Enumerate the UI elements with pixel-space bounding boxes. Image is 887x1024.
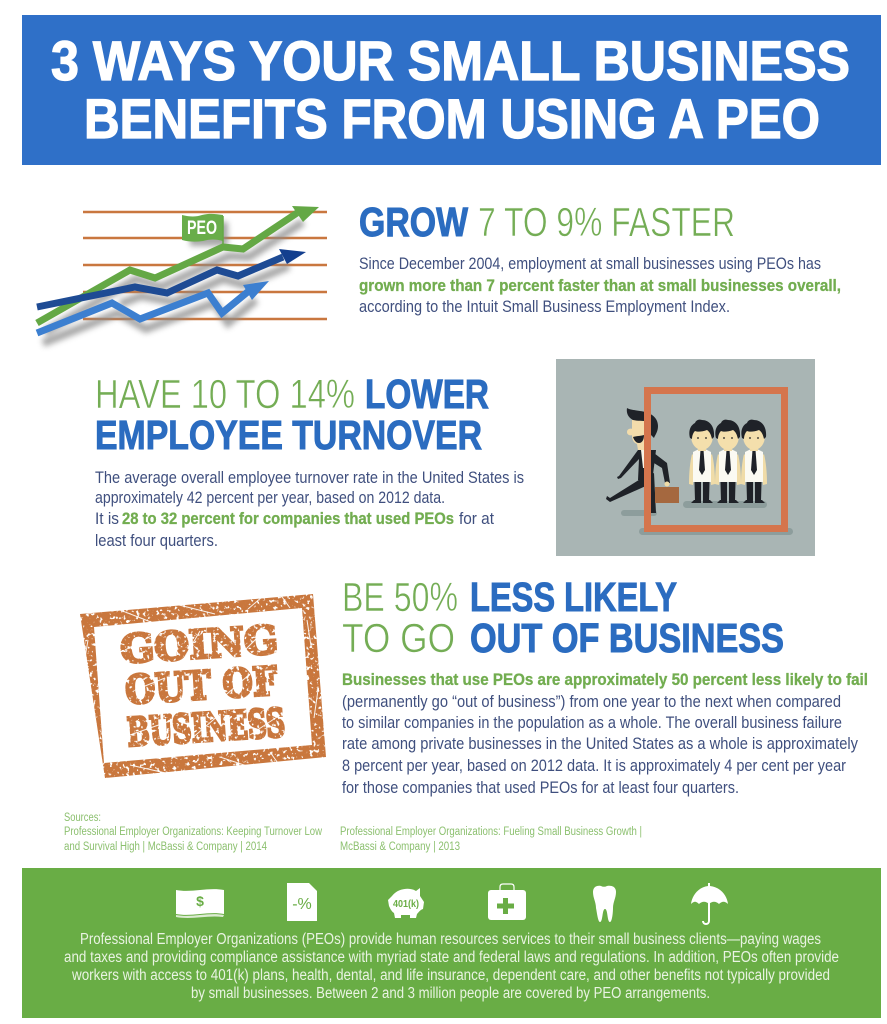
text block: grow: grown more than 7 percent faster than at small businesses overall, [359, 276, 841, 295]
text block: grow: according to the Intuit Small Business Employment Index. [359, 297, 730, 316]
flag: PEO: PEO [187, 218, 217, 239]
text block: turnover: The average overall employee turnover rate in the United States is [95, 468, 524, 487]
stamp: going out of business: BUSINESS [126, 700, 286, 756]
icon: tooth [593, 886, 616, 922]
heading: grow [359, 199, 735, 245]
employees [689, 420, 767, 503]
icon: money [176, 889, 224, 918]
briefcase [655, 487, 679, 503]
heading: less likely: LESS LIKELY [470, 574, 677, 620]
walking man [606, 408, 670, 513]
heading: less likely [342, 574, 784, 661]
text block: less likely: for those companies that used PEOs for at least four quarters. [342, 778, 739, 797]
icon: piggy bank: 401(k) [393, 899, 419, 910]
heading: less likely: BE 50% [342, 574, 458, 620]
sources: Sources: [64, 812, 101, 824]
footer panel [22, 868, 881, 1018]
section 2: turnover [95, 371, 524, 550]
stamp: going out of business [80, 594, 326, 778]
stamp: going out of business: GOING [119, 617, 279, 673]
icon: money: $ [196, 893, 204, 909]
orange frame [648, 390, 784, 528]
icon: first aid kit [488, 884, 526, 920]
sources: McBassi & Company | 2013 [340, 841, 460, 853]
heading: less likely: OUT OF BUSINESS [470, 615, 784, 661]
text block: turnover: for at [459, 509, 494, 528]
sources: Professional Employer Organizations: Fueling Small Business Growth | [340, 826, 642, 838]
text block: less likely [342, 670, 868, 797]
icon: umbrella [691, 883, 728, 924]
icon: document percent [287, 883, 317, 921]
sources: and Survival High | McBassi & Company | 2014 [64, 841, 268, 853]
footer text: by small businesses. Between 2 and 3 million people are covered by PEO arrangements. [191, 985, 710, 1002]
section 3: less likely [342, 574, 868, 797]
stamp: going out of business: OUT OF [124, 658, 279, 714]
footer text [64, 931, 839, 1002]
heading: turnover: EMPLOYEE TURNOVER [95, 412, 482, 458]
text block: grow [359, 254, 841, 316]
heading: less likely: TO GO [342, 615, 455, 661]
heading: turnover: LOWER [365, 371, 489, 417]
text block: turnover: 28 to 32 percent for companies that used PEOs [122, 509, 454, 528]
title banner [22, 15, 881, 165]
flag: PEO [182, 214, 223, 247]
icon: piggy bank [388, 888, 424, 918]
sources [64, 812, 642, 853]
heading: grow: 7 TO 9% FASTER [478, 199, 735, 245]
text block: turnover: approximately 42 percent per year, based on 2012 data. [95, 488, 445, 507]
sources: Professional Employer Organizations: Keeping Turnover Low [64, 826, 323, 838]
icon: document percent: -% [292, 896, 312, 913]
text block: turnover: least four quarters. [95, 531, 218, 550]
heading: turnover: HAVE 10 TO 14% [95, 371, 355, 417]
heading: grow: GROW [359, 199, 468, 245]
chart: rising PEO arrows [37, 206, 327, 343]
heading: turnover [95, 371, 489, 458]
illustration: employee leaving frame [556, 359, 815, 556]
text block: turnover: It is [95, 509, 119, 528]
text block: turnover [95, 468, 524, 550]
section 1: grow [359, 199, 841, 316]
